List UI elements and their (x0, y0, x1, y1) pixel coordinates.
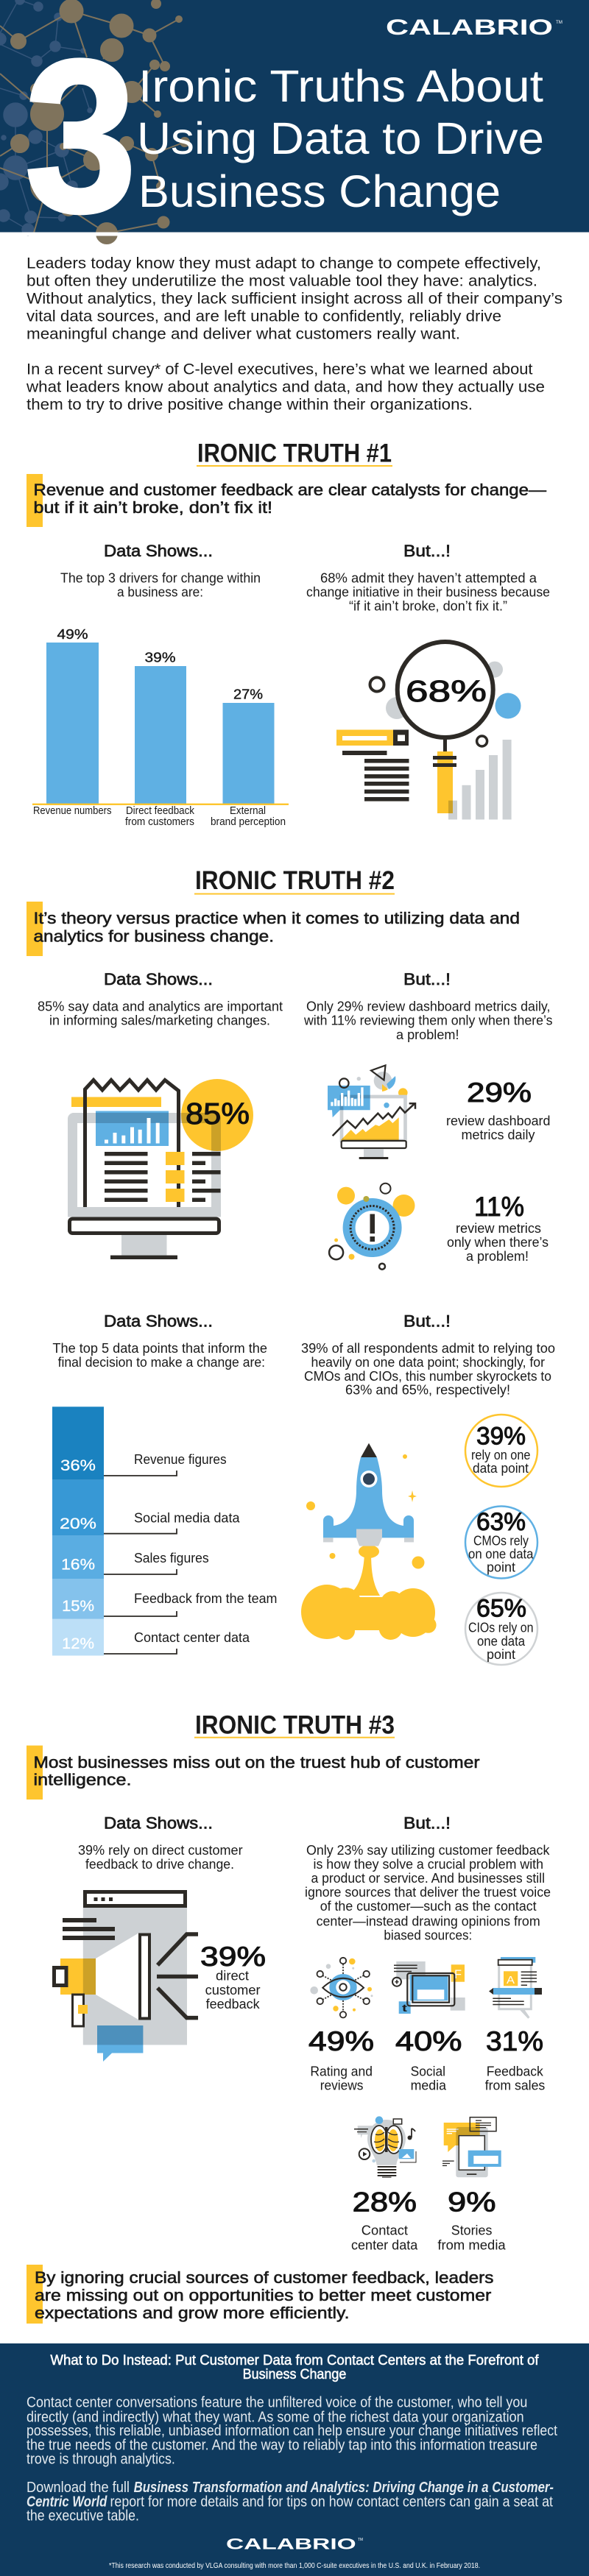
source: rating and reviews 49%: reviews (320, 2078, 363, 2093)
segment: feedback from the team 15%: 15% (62, 1598, 94, 1615)
source: contact center data 28% (351, 2116, 418, 2252)
footer paragraph 1: Contact center conversations feature the unfiltered voice of the customer, who tell you (27, 2394, 527, 2410)
bar: external brand perception 27%: brand perception (211, 816, 286, 828)
right description: biased sources: (384, 1928, 472, 1942)
stat: 11% review metrics only when there's a problem: a problem! (466, 1249, 529, 1264)
conclusion with yellow accent: are missing out on opportunities to better meet customer (35, 2286, 491, 2304)
lede with yellow accent: Revenue and customer feedback are clear catalysts for change— (34, 481, 546, 499)
right description: is how they solve a crucial problem with (314, 1857, 543, 1872)
left description: feedback to drive change. (85, 1857, 234, 1872)
bar: revenue numbers 49%: 49% (57, 627, 88, 642)
title (137, 61, 544, 216)
source: feedback from sales 31%: Feedback (487, 2064, 544, 2078)
callout: 63% CMOs rely on one data point: on one data (468, 1547, 534, 1562)
but heading: But...! (403, 970, 451, 988)
lede with yellow accent (27, 474, 546, 527)
stat: 11% review metrics only when there's a problem: 11% (474, 1192, 524, 1222)
logo: Calabrio footer (226, 2535, 363, 2552)
conclusion with yellow accent (27, 2265, 493, 2324)
bar: direct feedback 39%: from customers (125, 816, 194, 828)
left description: The top 5 data points that inform the (52, 1341, 267, 1356)
bar: revenue numbers 49%: Revenue numbers (33, 805, 112, 817)
callout: 65% CIOs rely on one data point: point (487, 1647, 515, 1662)
bar: external brand perception 27% (211, 687, 286, 828)
segment: contact center data 12% (52, 1619, 250, 1656)
stacked bar: top 5 data points (52, 1406, 277, 1656)
right description (303, 999, 552, 1042)
callout: 39% rely on one data point: rely on one (471, 1448, 530, 1462)
callout: 39% rely on one data point: data point (473, 1461, 529, 1476)
source: stories from media 9%: from media (437, 2237, 507, 2252)
title: Business Change (138, 166, 501, 216)
callout: 65% CIOs rely on one data point: 65% (476, 1594, 526, 1622)
section: ironic truth 2 (27, 866, 555, 1665)
icon: alert (329, 1183, 415, 1270)
source: rating and reviews 49%: 49% (308, 2026, 374, 2056)
segment: revenue figures 36%: Revenue figures (134, 1452, 227, 1467)
intro text: but often they underutilize the most valuable tool they have: analytics. (27, 272, 537, 290)
left description: The top 3 drivers for change within (60, 571, 261, 586)
source: feedback from sales 31%: 31% (486, 2026, 543, 2056)
icon: megaphone (54, 1891, 198, 2062)
lede with yellow accent: Most businesses miss out on the truest hub of customer (34, 1753, 480, 1772)
stat: 29% review dashboard metrics daily: review dashboard (446, 1114, 551, 1128)
intro text: what leaders know about analytics and data, and how they actually use (26, 378, 545, 395)
lede with yellow accent (27, 1746, 480, 1800)
footer paragraph 2 (27, 2480, 554, 2524)
footer panel (0, 2343, 589, 2576)
stat: 39% direct customer feedback: customer (205, 1983, 261, 1998)
stat: 39% direct customer feedback: feedback (206, 1997, 261, 2011)
segment: contact center data 12%: Contact center data (134, 1630, 250, 1645)
lede with yellow accent: intelligence. (34, 1771, 131, 1789)
icon: magnifying glass 68%: 68% (406, 674, 487, 708)
left description (38, 999, 283, 1027)
left description (52, 1341, 267, 1370)
left description: in informing sales/marketing changes. (49, 1013, 270, 1027)
segment: sales figures 16%: 16% (61, 1556, 95, 1574)
big numeral 3: 3 (24, 14, 137, 258)
conclusion with yellow accent: By ignoring crucial sources of customer feedback, leaders (35, 2268, 493, 2287)
footer paragraph 1: trove is through analytics. (27, 2451, 175, 2467)
data shows heading: Data Shows... (104, 970, 213, 988)
stat: 39% direct customer feedback: 39% (200, 1942, 266, 1972)
stat: 39% direct customer feedback (200, 1942, 266, 2011)
section: ironic truth 3 (27, 1710, 551, 2324)
footer paragraph 2: Centric World (27, 2494, 107, 2510)
callout: 39% rely on one data point: 39% (476, 1422, 526, 1450)
right description: Only 29% review dashboard metrics daily, (306, 999, 551, 1014)
callout: 63% CMOs rely on one data point: 63% (476, 1508, 526, 1536)
lede with yellow accent: but if it ain’t broke, don’t fix it! (34, 498, 272, 517)
left description: a business are: (117, 584, 203, 599)
source: stories from media 9%: 9% (448, 2187, 496, 2217)
right description: 63% and 65%, respectively! (345, 1383, 510, 1398)
segment: feedback from the team 15%: Feedback from the team (134, 1591, 277, 1606)
heading: ironic truth 2: IRONIC TRUTH #2 (195, 866, 395, 895)
right description: 39% of all respondents admit to relying too (301, 1341, 555, 1356)
icon: magnifying glass 68% (336, 642, 521, 820)
source: social media 40%: media (411, 2078, 447, 2093)
callout: 65% CIOs rely on one data point: CIOs rely on (468, 1621, 533, 1635)
heading: ironic truth 1: IRONIC TRUTH #1 (197, 439, 392, 468)
segment: social media data 20%: 20% (60, 1515, 96, 1532)
icon: document (489, 1957, 542, 2018)
callout: 65% CIOs rely on one data point: one data (477, 1634, 526, 1649)
footer heading: What to Do Instead: Put Customer Data from Contact Centers at the Forefront of (50, 2353, 539, 2368)
right description: with 11% reviewing them only when there’s (303, 1013, 552, 1027)
segment: sales figures 16% (52, 1535, 209, 1579)
but heading: But...! (403, 542, 451, 560)
logo: Calabrio (386, 15, 562, 40)
footer paragraph 1: directly (and indirectly) what they want. As some of the richest data your organization (27, 2409, 524, 2425)
header banner (0, 0, 589, 258)
network pattern (0, 0, 189, 244)
source: feedback from sales 31% (485, 1957, 545, 2093)
source: social media 40%: Social (411, 2064, 445, 2078)
lede with yellow accent: analytics for business change. (34, 927, 274, 945)
icon: eye (310, 1958, 373, 2018)
lede with yellow accent (27, 902, 520, 956)
icon: document: A (507, 1974, 515, 1986)
segment: revenue figures 36% (52, 1406, 227, 1480)
intro text: Leaders today know they must adapt to change to compete effectively, (27, 254, 541, 272)
callout: 63% CMOs rely on one data point (465, 1506, 537, 1578)
bar chart: top 3 drivers (32, 627, 289, 828)
segment: feedback from the team 15% (52, 1579, 277, 1619)
callout: 39% rely on one data point (465, 1415, 537, 1487)
source: rating and reviews 49% (308, 1958, 374, 2093)
icon: monitor with report 85%: 85% (186, 1097, 250, 1130)
right description: ignore sources that deliver the truest voice (305, 1885, 551, 1900)
left description (60, 571, 261, 599)
source: contact center data 28%: 28% (353, 2187, 417, 2217)
right description: a product or service. And businesses still (311, 1871, 545, 1886)
callout: 63% CMOs rely on one data point: CMOs rely (473, 1533, 529, 1548)
stat: 11% review metrics only when there's a problem (329, 1183, 549, 1270)
bar: external brand perception 27%: 27% (233, 687, 263, 701)
bar: direct feedback 39%: 39% (144, 651, 175, 665)
right description: “if it ain’t broke, don’t fix it.” (349, 598, 507, 613)
stat: 11% review metrics only when there's a problem: only when there’s (447, 1235, 549, 1250)
intro text: vital data sources, and are left unable to confidently, reliably drive (27, 308, 501, 325)
icon: tablet: F (454, 1967, 462, 1981)
intro text: meaningful change and deliver what customers really want. (27, 325, 460, 342)
source: stories from media 9%: Stories (451, 2223, 492, 2237)
callout: 65% CIOs rely on one data point (465, 1593, 537, 1665)
intro text: In a recent survey* of C-level executives, here’s what we learned about (27, 360, 533, 378)
stat: 39% direct customer feedback: direct (216, 1969, 249, 1984)
right description (301, 1341, 555, 1398)
segment: social media data 20%: Social media data (134, 1510, 240, 1525)
intro text: Without analytics, they lack sufficient insight across all of their company’s (27, 290, 562, 308)
segment: sales figures 16%: Sales figures (134, 1551, 209, 1565)
footer paragraph 1 (27, 2394, 557, 2467)
right description: Only 23% say utilizing customer feedback (306, 1843, 550, 1858)
right description: change initiative in their business because (306, 584, 550, 599)
data shows heading: Data Shows... (104, 1814, 213, 1833)
right description: center—instead drawing opinions from (317, 1914, 540, 1928)
right description: heavily on one data point; shockingly, for (311, 1355, 545, 1370)
conclusion with yellow accent: expectations and grow more efficiently. (35, 2304, 350, 2322)
intro text (26, 254, 562, 414)
source: social media 40% (392, 1961, 465, 2093)
right description: of the customer—such as the contact (320, 1899, 537, 1914)
logo: Calabrio: TM (556, 21, 562, 25)
segment: revenue figures 36%: 36% (60, 1457, 96, 1474)
left description (78, 1843, 243, 1872)
icon: phone and chat (442, 2117, 501, 2177)
icon: monitor with report 85% (68, 1079, 253, 1259)
callout: 63% CMOs rely on one data point: point (487, 1560, 515, 1575)
right description (305, 1843, 551, 1942)
bar: external brand perception 27%: External (230, 805, 266, 817)
data shows heading: Data Shows... (104, 1312, 213, 1331)
icon: dashboard monitor (328, 1066, 415, 1159)
source: contact center data 28%: Contact (361, 2223, 408, 2237)
right description: 68% admit they haven’t attempted a (320, 571, 537, 586)
logo: Calabrio footer: CALABRIO (226, 2535, 356, 2552)
logo: Calabrio footer: TM (358, 2538, 363, 2542)
source: contact center data 28%: center data (351, 2237, 418, 2252)
stat: 11% review metrics only when there's a problem: review metrics (456, 1221, 541, 1236)
right description (306, 571, 550, 613)
source: rating and reviews 49%: Rating and (310, 2064, 373, 2078)
icon: rocket (301, 1443, 437, 1640)
left description: 85% say data and analytics are important (38, 999, 283, 1014)
stat: 29% review dashboard metrics daily: metrics daily (461, 1128, 535, 1142)
footnote: *This research was conducted by VLGA consulting with more than 1,000 C-suite executives in the U.S. and U.K. in February 2018. (109, 2562, 480, 2570)
section: ironic truth 1 (27, 439, 550, 828)
title: Ironic Truths About (138, 61, 543, 111)
bar: revenue numbers 49% (33, 627, 112, 817)
left description: final decision to make a change are: (58, 1355, 265, 1370)
heading: ironic truth 3: IRONIC TRUTH #3 (195, 1710, 395, 1739)
footer paragraph 2: Download the full (27, 2480, 130, 2496)
icon: tablet (392, 1961, 465, 2014)
bar: direct feedback 39%: Direct feedback (126, 805, 195, 817)
but heading: But...! (403, 1814, 451, 1833)
footer heading: Business Change (243, 2367, 346, 2382)
segment: social media data 20% (52, 1480, 240, 1535)
icon: tablet: t (402, 2002, 407, 2014)
segment: contact center data 12%: 12% (62, 1635, 94, 1652)
icon: lightbulb brain (354, 2116, 416, 2178)
right description: CMOs and CIOs, this number skyrockets to (304, 1369, 551, 1384)
but heading: But...! (403, 1312, 451, 1331)
source: social media 40%: 40% (395, 2026, 462, 2056)
footer paragraph 2: the executive table. (27, 2508, 139, 2524)
data shows heading: Data Shows... (104, 542, 213, 560)
lede with yellow accent: It’s theory versus practice when it comes to utilizing data and (34, 909, 520, 927)
stat: 29% review dashboard metrics daily (328, 1066, 551, 1159)
stat: 29% review dashboard metrics daily: 29% (467, 1078, 532, 1108)
left description: 39% rely on direct customer (78, 1843, 243, 1858)
source: feedback from sales 31%: from sales (485, 2078, 545, 2093)
title: Using Data to Drive (137, 113, 544, 163)
footer paragraph 1: the true needs of the customer. And the way to reliably tap into this information treasure (27, 2438, 537, 2454)
footer heading (50, 2353, 539, 2382)
source: stories from media 9% (437, 2117, 507, 2252)
logo: Calabrio: CALABRIO (386, 15, 553, 40)
right description: a problem! (396, 1027, 459, 1042)
bar: direct feedback 39% (125, 651, 195, 828)
intro text: them to try to drive positive change within their organizations. (27, 396, 473, 414)
